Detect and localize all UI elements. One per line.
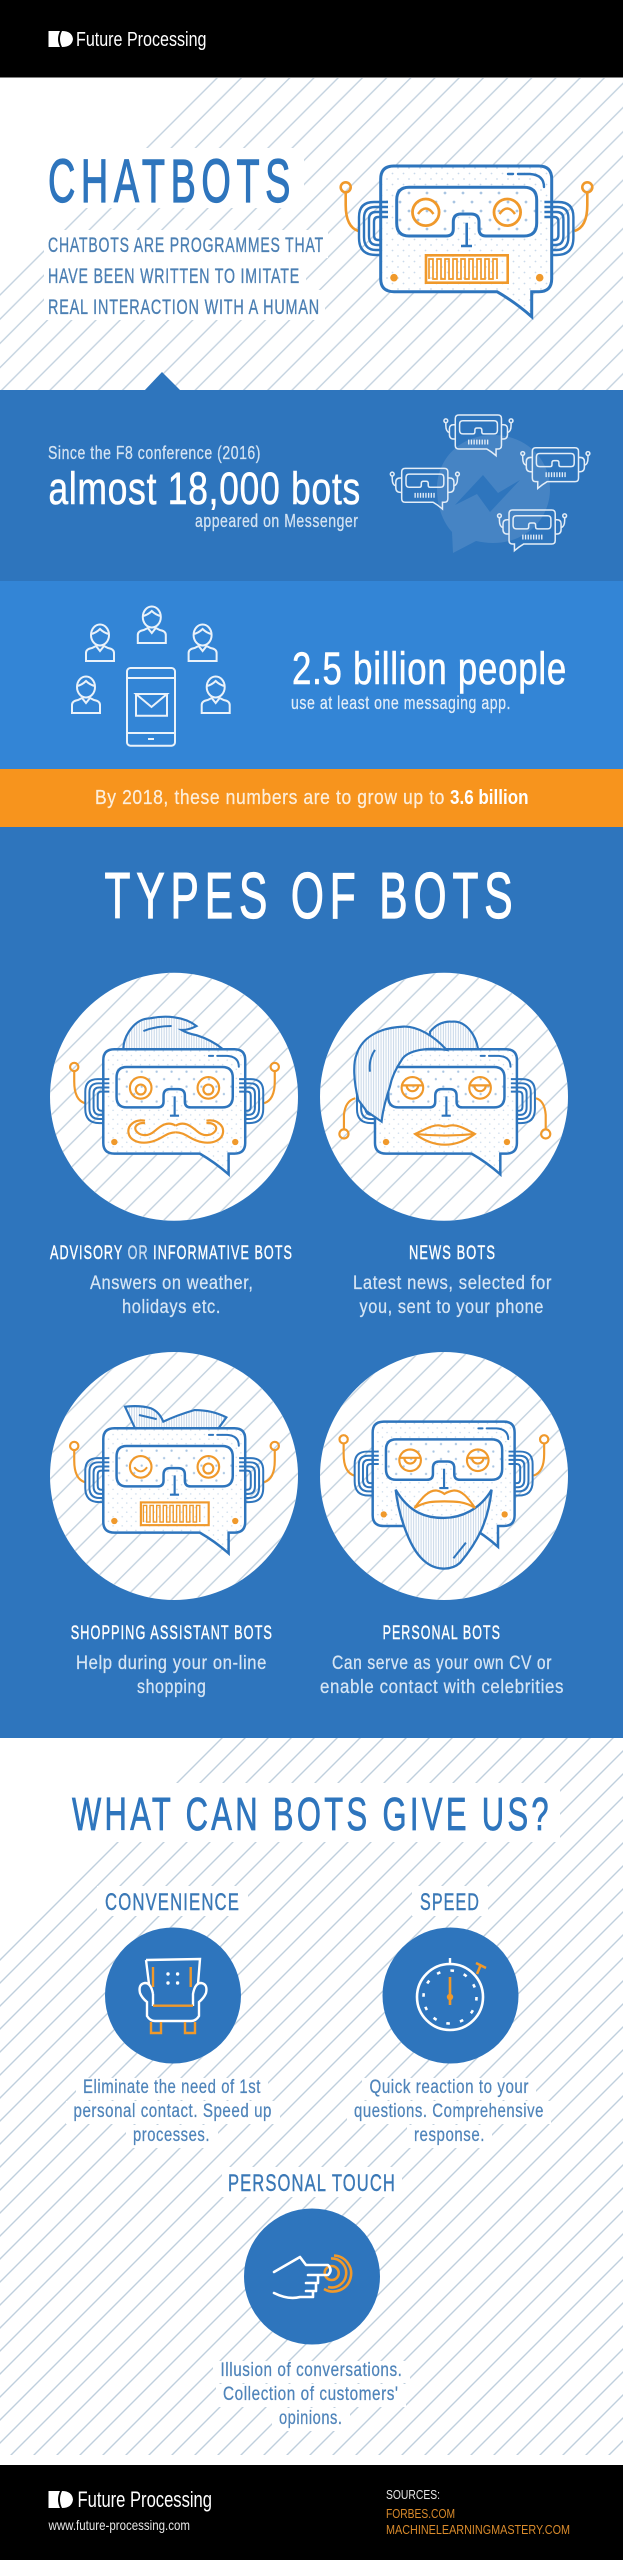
description bbox=[74, 2077, 272, 2146]
description: processes. bbox=[133, 2125, 210, 2146]
since text: Since the F8 conference (2016) bbox=[48, 443, 261, 463]
icon: stopwatch in circle bbox=[382, 1928, 518, 2064]
card: news bots bbox=[320, 973, 568, 1318]
intro text bbox=[48, 234, 324, 319]
intro text: REAL INTERACTION WITH A HUMAN bbox=[48, 296, 320, 319]
label: CONVENIENCE bbox=[105, 1889, 240, 1916]
description bbox=[320, 1653, 564, 1698]
description: Eliminate the need of 1st bbox=[83, 2077, 261, 2098]
logo icon bbox=[48, 31, 73, 47]
footer bbox=[0, 2465, 623, 2560]
description bbox=[76, 1653, 267, 1698]
usage text: use at least one messaging app. bbox=[291, 693, 511, 713]
panel: orange banner bbox=[0, 769, 623, 827]
description: Help during your on-line bbox=[76, 1653, 267, 1674]
appeared text: appeared on Messenger bbox=[195, 511, 358, 531]
icon: people around a phone bbox=[72, 606, 230, 746]
description bbox=[90, 1273, 254, 1318]
label: PERSONAL TOUCH bbox=[228, 2170, 396, 2197]
logo wordmark: Future Processing bbox=[78, 2487, 212, 2512]
description: holidays etc. bbox=[122, 1297, 221, 1318]
benefit: convenience bbox=[74, 1889, 272, 2146]
description bbox=[220, 2360, 402, 2429]
description bbox=[353, 1273, 552, 1318]
description: Answers on weather, bbox=[90, 1273, 254, 1294]
icon: robot with beard bbox=[339, 1422, 548, 1569]
messenger logo background bbox=[437, 435, 550, 553]
description: questions. Comprehensive bbox=[354, 2101, 544, 2122]
panel: intro with hatched background bbox=[0, 78, 623, 391]
description: Can serve as your own CV or bbox=[332, 1653, 552, 1674]
label: SPEED bbox=[420, 1889, 480, 1916]
title: CHATBOTS bbox=[48, 147, 296, 215]
pointer triangle bbox=[144, 372, 181, 391]
description: personal contact. Speed up bbox=[74, 2101, 272, 2122]
intro text: HAVE BEEN WRITTEN TO IMITATE bbox=[48, 265, 300, 288]
icon: main robot speech bubble bbox=[341, 166, 592, 317]
panel: 18,000 bots bbox=[0, 390, 623, 581]
icon: armchair in circle bbox=[105, 1928, 241, 2064]
description bbox=[354, 2077, 544, 2146]
icon: robot with moustache bbox=[70, 1017, 279, 1174]
logo wordmark: Future Processing bbox=[76, 29, 206, 51]
icon: robot winking bbox=[70, 1406, 279, 1553]
panel: 2.5 billion people bbox=[0, 581, 623, 769]
label: NEWS BOTS bbox=[409, 1243, 496, 1264]
panel: types of bots bbox=[0, 827, 623, 1738]
label: SHOPPING ASSISTANT BOTS bbox=[71, 1623, 273, 1644]
intro text: CHATBOTS ARE PROGRAMMES THAT bbox=[48, 234, 324, 257]
sources bbox=[386, 2487, 570, 2537]
website: www.future-processing.com bbox=[48, 2517, 190, 2533]
description: Latest news, selected for bbox=[353, 1273, 552, 1294]
description: Illusion of conversations. bbox=[220, 2360, 402, 2381]
sources: SOURCES: bbox=[386, 2487, 440, 2502]
big number: almost 18,000 bots bbox=[48, 463, 361, 514]
logo icon bbox=[48, 2491, 73, 2508]
description: enable contact with celebrities bbox=[320, 1677, 564, 1698]
panel: orange banner: 3.6 billion bbox=[450, 787, 528, 809]
header bar with logo bbox=[0, 0, 623, 78]
description: Collection of customers' bbox=[223, 2384, 398, 2405]
card: shopping assistant bots bbox=[50, 1352, 298, 1698]
card: personal bots bbox=[320, 1352, 568, 1698]
label: ADVISORY OR INFORMATIVE BOTS bbox=[50, 1243, 293, 1264]
card: advisory bots bbox=[50, 973, 298, 1318]
benefit: personal touch bbox=[220, 2170, 402, 2429]
icon: robot with hair and lips bbox=[339, 1022, 550, 1174]
panel: what can bots give us bbox=[0, 1738, 623, 2455]
description: you, sent to your phone bbox=[360, 1297, 544, 1318]
sources: FORBES.COM bbox=[386, 2506, 455, 2521]
description: opinions. bbox=[279, 2408, 342, 2429]
description: Quick reaction to your bbox=[370, 2077, 529, 2098]
panel: orange banner: By 2018, these numbers are to grow up to bbox=[95, 787, 445, 809]
icon: hand touching button bbox=[244, 2208, 380, 2344]
description: response. bbox=[414, 2125, 485, 2146]
label: PERSONAL BOTS bbox=[383, 1623, 501, 1644]
sources: MACHINELEARNINGMASTERY.COM bbox=[386, 2522, 570, 2537]
benefit: speed bbox=[354, 1889, 544, 2146]
description: shopping bbox=[137, 1677, 206, 1698]
icon: small robots bbox=[390, 415, 590, 551]
